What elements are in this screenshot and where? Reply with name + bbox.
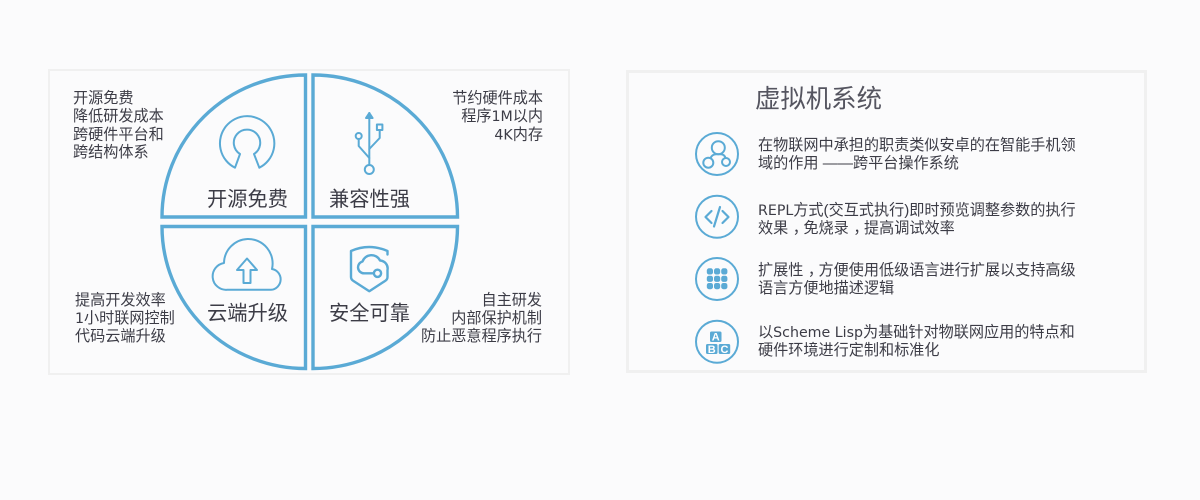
text block: open source details: 降低研发成本 [73,108,164,125]
text: iot role [758,136,1076,172]
text block: cloud upgrade details: 代码云端升级 [75,328,166,345]
panel: features circle [49,70,569,374]
item: repl [696,196,1076,238]
label: compatibility: 兼容性强 [329,188,410,211]
text: iot role: 域的作用 ——跨平台操作系统 [758,155,959,172]
quadrant: security [313,226,458,368]
text block: open source details: 跨硬件平台和 [73,126,164,144]
text block: cloud upgrade details [75,292,175,345]
icon: abc blocks: A [712,332,720,344]
icon: code [696,196,738,238]
label: security: 安全可靠 [329,302,410,325]
text block: open source details: 跨结构体系 [73,144,149,161]
text: repl: REPL方式(交互式执行)即时预览调整参数的执行 [758,201,1076,219]
item: scheme lisp [696,321,1075,363]
label: open source: 开源免费 [207,188,288,211]
text: extensibility: 扩展性 ，方便使用低级语言进行扩展以支持高级 [758,262,1076,279]
label: cloud upgrade: 云端升级 [207,302,288,325]
icon: abc blocks: B [708,344,716,356]
text block: compatibility details: 节约硬件成本 [452,90,543,107]
text block: cloud upgrade details: 1小时联网控制 [75,310,175,327]
icon: open source logo [220,116,274,168]
text: repl [758,201,1076,237]
text block: security details: 自主研发 [481,292,542,309]
item: iot role [696,133,1076,175]
text block: security details: 内部保护机制 [451,310,542,327]
quadrant: cloud upgrade [162,226,306,368]
text: repl: 效果 ，免烧录 ，提高调试效率 [758,220,955,237]
text block: security details [421,292,542,345]
text block: open source details [73,90,164,161]
text block: compatibility details: 4K内存 [494,126,543,144]
panel: virtual machine system [628,72,1146,372]
icon: grid [696,258,738,300]
icon: cloud shield [351,247,388,291]
icon: cloud upload [213,239,281,290]
text: extensibility: 语言方便地描述逻辑 [758,280,894,297]
text block: cloud upgrade details: 提高开发效率 [75,292,166,309]
text: scheme lisp: 硬件环境进行定制和标准化 [758,341,940,359]
item: extensibility [696,258,1076,300]
icon: nodes [696,133,738,175]
icon: usb [356,113,382,174]
text: scheme lisp: 以Scheme Lisp为基础针对物联网应用的特点和 [758,323,1075,341]
icon: abc blocks: C [721,344,729,356]
text: extensibility [758,262,1076,297]
text: iot role: 在物联网中承担的职责类似安卓的在智能手机领 [758,136,1076,154]
text block: open source details: 开源免费 [73,90,134,107]
text block: compatibility details [452,90,543,144]
text block: compatibility details: 程序1M以内 [461,108,543,125]
title: 虚拟机系统 [755,86,882,114]
quadrant: open source [162,75,306,217]
text block: security details: 防止恶意程序执行 [421,327,542,345]
text: scheme lisp [758,323,1075,359]
quadrant: compatibility [313,75,458,217]
icon: abc blocks [696,321,738,363]
